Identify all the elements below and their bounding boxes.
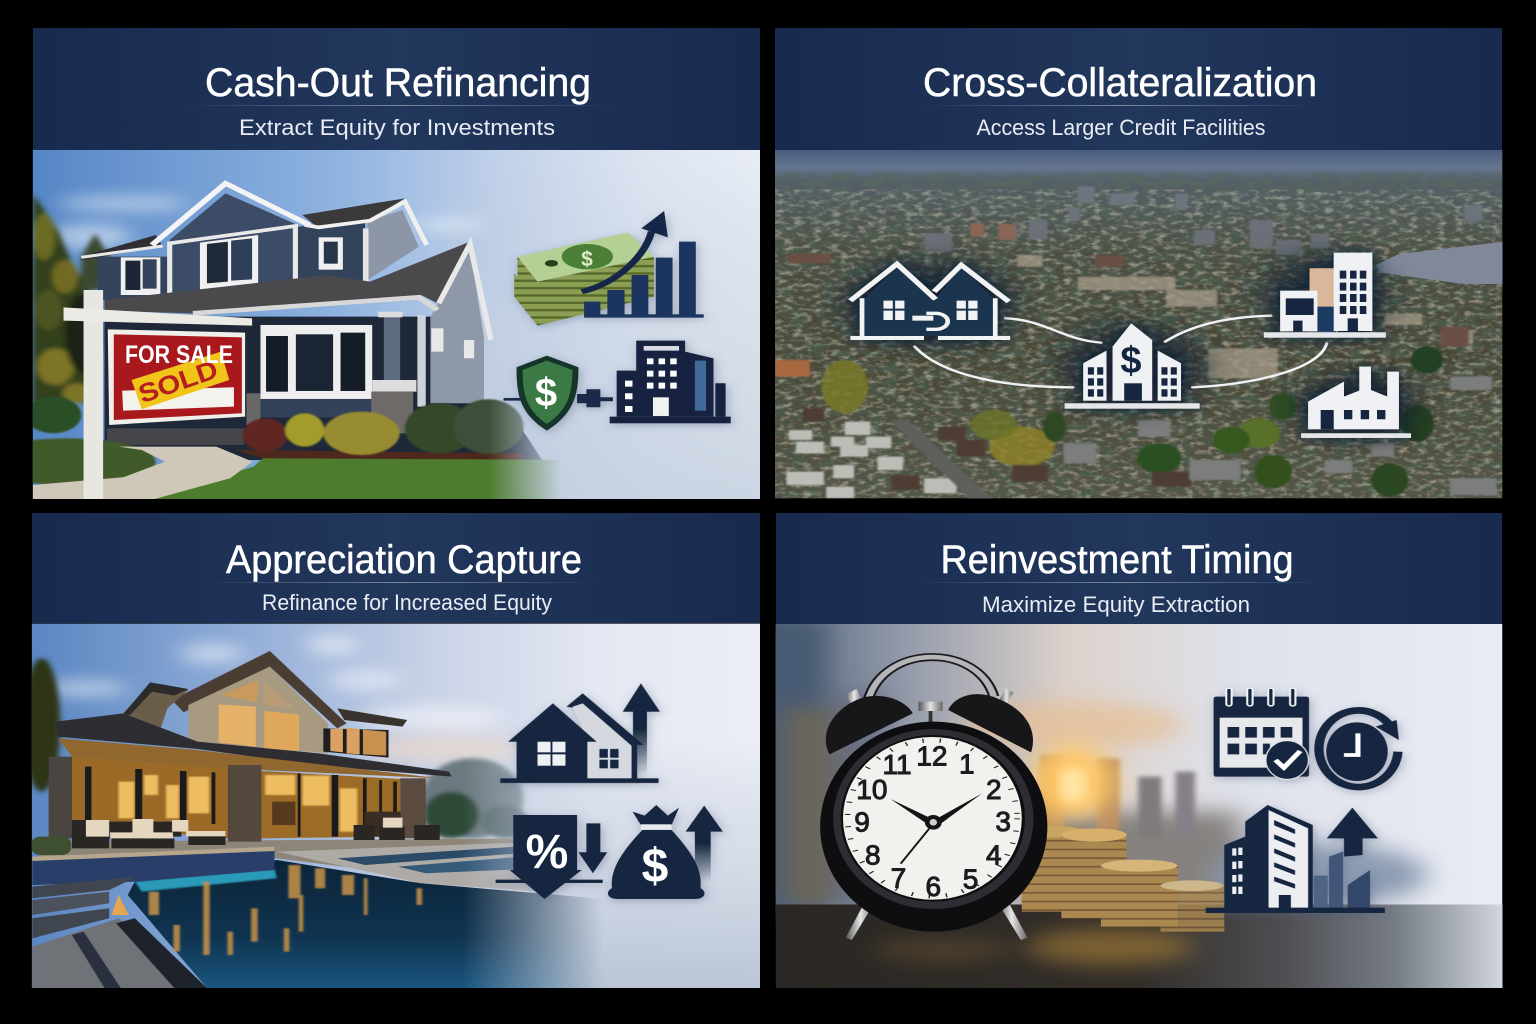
icon: shield to building [504, 341, 731, 431]
panel: Cross-Collateralization [775, 28, 1505, 500]
clock face: 4 [986, 839, 1002, 870]
icon: office towers [1264, 253, 1386, 338]
for sale sign board [108, 329, 245, 425]
icon: calendar with check [1214, 690, 1309, 779]
sign sticker text: sold: SOLD [134, 354, 222, 409]
subheading: Maximize Equity Extraction [982, 592, 1250, 617]
clock face [843, 737, 1022, 902]
scene: aerial city with linked property icons [775, 150, 1505, 500]
clock face: 7 [891, 863, 906, 894]
clock face: 2 [986, 774, 1002, 805]
icon: building with rising arrow [1206, 805, 1385, 913]
heading: Reinvestment Timing [940, 538, 1294, 582]
icon: percent down [496, 815, 607, 899]
heading: Appreciation Capture [226, 538, 582, 582]
icon text: cash dollar: $ [581, 248, 593, 271]
icon: two linked houses [850, 264, 1010, 340]
heading: Cross-Collateralization [923, 61, 1317, 105]
header band: Cross-Collateralization [775, 28, 1502, 150]
clock face: 11 [882, 749, 912, 780]
subheading: Extract Equity for Investments [239, 115, 555, 140]
icon: central bank building [1065, 323, 1200, 409]
link curves between properties [915, 316, 1327, 387]
heading: Cash-Out Refinancing [205, 61, 591, 105]
subheading: Refinance for Increased Equity [262, 590, 552, 615]
clock face: 6 [926, 871, 941, 902]
subheading: Access Larger Credit Facilities [976, 115, 1266, 140]
icon text: bank dollar: $ [1120, 340, 1142, 382]
icon text: shield dollar: $ [535, 371, 557, 415]
scene: luxury house with pool [23, 623, 760, 990]
header band: Cash-Out Refinancing [33, 28, 760, 150]
sign text: for sale: FOR SALE [125, 341, 233, 369]
clock face: 10 [856, 774, 887, 805]
scene: house with sold sign [0, 150, 760, 500]
scene: alarm clock and coins [756, 618, 1505, 991]
for sale sign post [64, 290, 252, 500]
clock face: 5 [963, 863, 978, 894]
clock face: 9 [854, 807, 870, 838]
panel: Reinvestment Timing [756, 513, 1505, 991]
panel: Cash-Out Refinancing [0, 28, 760, 500]
header band: Reinvestment Timing [776, 513, 1502, 624]
icon text: percent: % [526, 826, 568, 879]
header band: Appreciation Capture [32, 513, 760, 623]
icon: two houses with rising arrow [500, 683, 660, 783]
alarm clock [820, 657, 1047, 940]
icon text: bag dollar: $ [642, 840, 669, 893]
coin stacks [1020, 826, 1224, 932]
clock face: 12 [916, 741, 947, 772]
icon: money bag with arrow [608, 805, 723, 899]
clock face: 3 [995, 806, 1011, 837]
clock face: 1 [959, 748, 975, 779]
clock face: 8 [865, 839, 881, 870]
icon: clock with cycle arrow [1319, 710, 1399, 787]
icon: factory [1301, 367, 1411, 438]
icon: cash stack and rising chart [514, 211, 704, 326]
panel: Appreciation Capture [23, 513, 760, 990]
